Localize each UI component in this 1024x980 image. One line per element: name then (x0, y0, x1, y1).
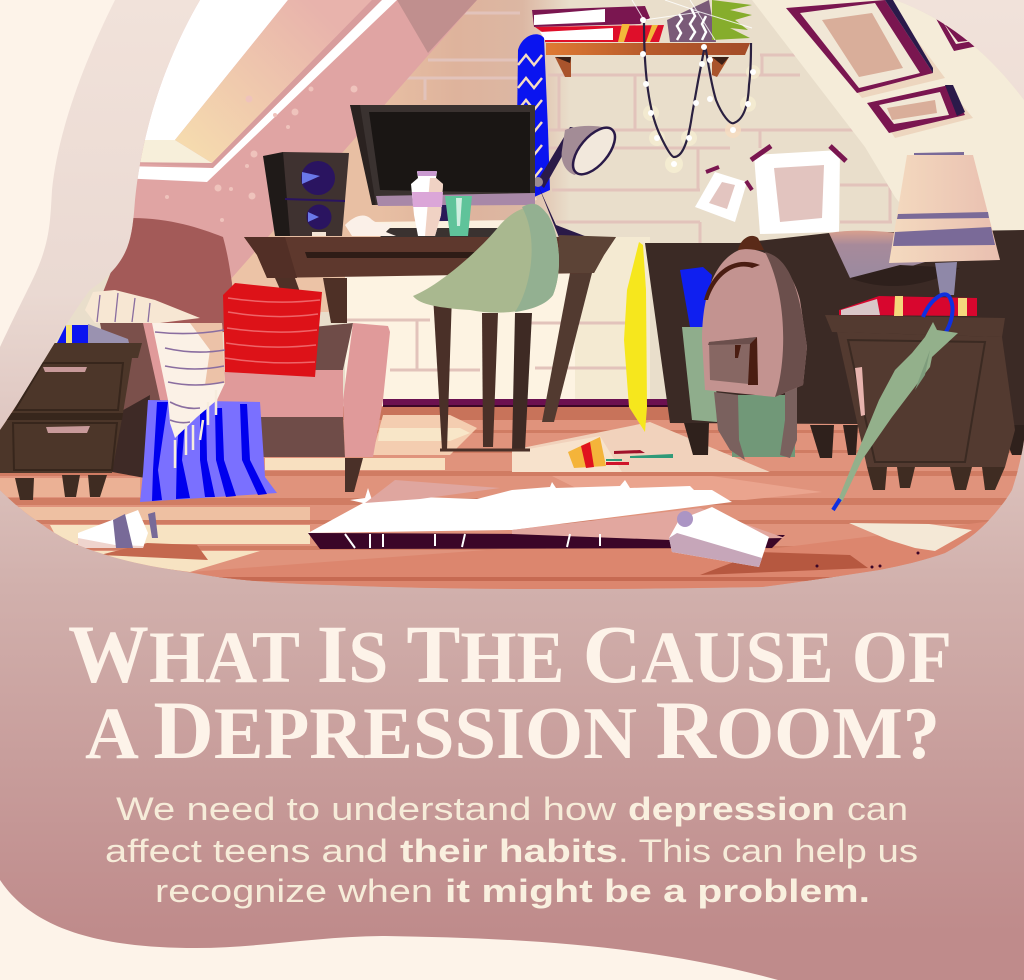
blue zigzag scarf (516, 34, 550, 205)
table lamp (889, 152, 1000, 295)
umbrella (833, 294, 958, 510)
wall photo large (751, 146, 846, 234)
desk lamp (535, 126, 616, 237)
rug (308, 480, 785, 549)
wall photo small (695, 167, 752, 222)
sloped ceiling left (130, 0, 477, 300)
ceiling shadow (397, 0, 477, 53)
vase (411, 171, 443, 236)
intro paragraph: can (847, 791, 908, 827)
cobweb (632, 0, 752, 40)
right sloped ceiling (752, 0, 1024, 235)
red cushion (223, 283, 322, 377)
room illustration (0, 0, 1024, 596)
red book (839, 296, 977, 316)
paper on floor (849, 523, 972, 551)
intro paragraph (105, 791, 918, 909)
intro paragraph: . This can help us (618, 833, 918, 869)
handle (738, 236, 764, 250)
armchair (100, 218, 390, 492)
title (68, 608, 952, 776)
dust specks (816, 552, 920, 568)
white device (669, 507, 769, 567)
pot (667, 0, 716, 42)
intro paragraph: it might be a problem. (445, 873, 870, 909)
skylight (120, 0, 397, 222)
blue cloth (680, 267, 712, 330)
string lights (640, 17, 760, 173)
pocket (709, 337, 758, 385)
picture frame large (786, 0, 945, 98)
sofa right (645, 230, 1024, 458)
blue striped blanket (140, 400, 277, 502)
left nightstand (0, 324, 142, 500)
green bag (682, 327, 717, 422)
striped throw (152, 323, 225, 468)
plant (712, 0, 752, 40)
title: WHAT IS THE CAUSE OF (68, 608, 952, 700)
straps (714, 385, 797, 460)
intro paragraph: depression (628, 791, 835, 827)
tissue (345, 216, 396, 236)
books (532, 6, 664, 42)
intro paragraph: affect teens and (105, 833, 388, 869)
fallen tube (78, 510, 158, 548)
glass (445, 196, 472, 236)
title: A DEPRESSION ROOM? (85, 684, 940, 776)
picture frame top right (936, 19, 975, 51)
floor (0, 399, 1024, 596)
wall (55, 0, 899, 406)
white pillow (85, 290, 200, 323)
intro paragraph: recognize when (155, 873, 433, 909)
backpack (680, 236, 807, 460)
yellow scarf (624, 242, 647, 432)
shelf with books and plant (532, 0, 752, 77)
cup and pencils (568, 437, 673, 468)
intro paragraph: We need to understand how (116, 791, 617, 827)
desk (244, 235, 616, 422)
chair back (413, 204, 559, 450)
monitor (350, 105, 535, 237)
right nightstand (825, 296, 1015, 490)
picture frame small (867, 85, 973, 138)
light patches (372, 415, 477, 455)
floor shadow (100, 543, 208, 560)
speakers (263, 152, 349, 236)
intro paragraph: their habits (400, 833, 618, 869)
